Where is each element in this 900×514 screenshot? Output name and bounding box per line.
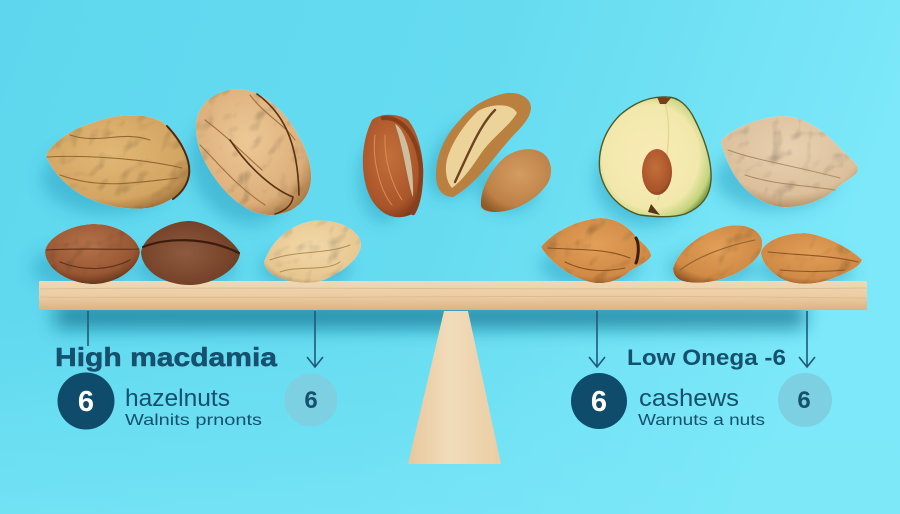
badge: left dark 6: 6 <box>78 386 94 418</box>
badge: right dark 6 <box>571 373 627 429</box>
badge: right dark 6: 6 <box>591 386 607 418</box>
nut: large walnut top left <box>46 115 189 209</box>
badge: left dark 6 <box>58 372 114 430</box>
seesaw fulcrum <box>408 311 501 464</box>
label: hazelnuts: hazelnuts <box>125 385 230 412</box>
nut: walnut bottom right 3 <box>761 233 862 284</box>
heading: low omega-6: Low Onega -6 <box>627 345 786 370</box>
avocado half <box>599 97 711 217</box>
left down arrow <box>307 311 323 367</box>
label: walnuts right: Warnuts a nuts <box>638 412 765 429</box>
avocado pit <box>642 149 672 195</box>
badge: right light 6: 6 <box>797 387 811 414</box>
nut: large walnut top centre-left <box>196 89 311 215</box>
right down arrow 2 <box>799 311 815 367</box>
label: cashews: cashews <box>639 385 739 412</box>
heading: high macdamia: High macdamia <box>55 342 278 372</box>
badge: left light 6 <box>284 374 338 426</box>
right down arrow 1 <box>589 311 605 367</box>
nut: pale wrinkled shell <box>721 116 858 207</box>
nut: walnut bottom right 1 <box>541 218 651 283</box>
left arrow line <box>87 311 89 346</box>
nut: open almond shell <box>363 115 423 217</box>
seesaw plank <box>39 281 867 310</box>
nut: brown walnut bottom left <box>45 224 140 284</box>
nut: pale walnut <box>264 220 361 283</box>
badge: right light 6 <box>778 373 832 427</box>
label: walnuts left: Walnits prnonts <box>125 412 262 429</box>
drop shadows under nuts and plank <box>32 96 853 328</box>
nut: walnut bottom right 2 <box>673 225 762 283</box>
nut: dark brown walnut <box>141 221 240 285</box>
badge: left light 6: 6 <box>304 387 318 414</box>
nut: smooth almond <box>481 149 551 212</box>
nut: cracked walnut half <box>436 93 531 197</box>
